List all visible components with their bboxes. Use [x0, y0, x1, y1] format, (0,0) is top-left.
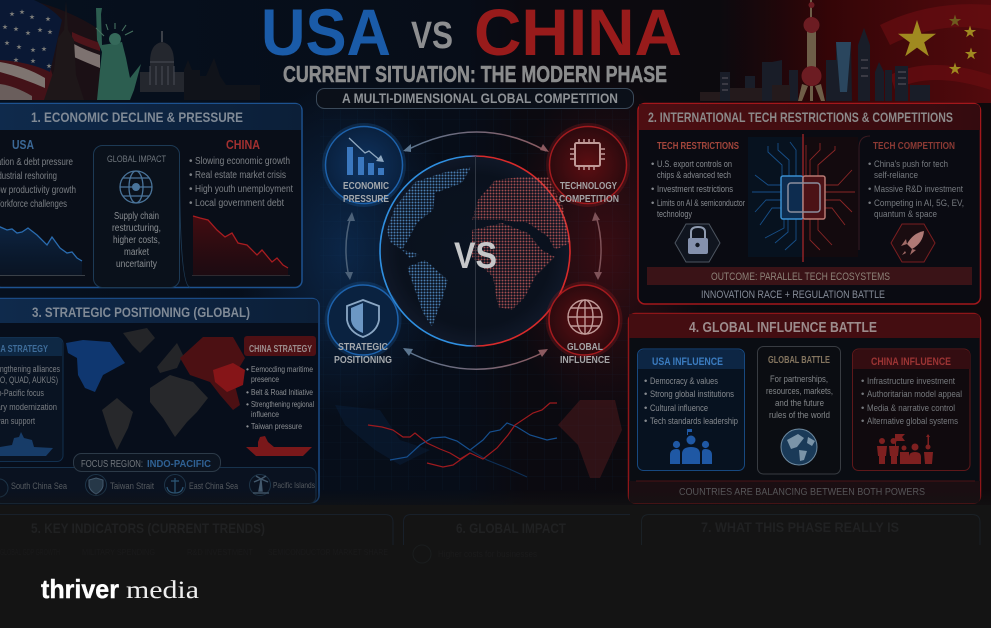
icon: shield: [347, 300, 379, 337]
subtitle: CURRENT SITUATION: THE MODERN PHASE: [283, 61, 667, 87]
node: global influence: INFLUENCE: [560, 354, 610, 366]
tech restrictions column: •: [651, 184, 654, 195]
China strategy box: presence: [251, 374, 279, 384]
USA influence card: [638, 349, 744, 470]
global impact box: GLOBAL IMPACT: [107, 154, 166, 165]
panel 1 header: [0, 104, 301, 130]
China strategy box: Eemocding maritime: [251, 364, 313, 374]
icon: globe: [120, 171, 152, 203]
global battle card: For partnerships,: [770, 374, 828, 385]
panel 5 ghost: key indicators: MILITARY SPENDING: [82, 548, 155, 557]
global battle card: rules of the world: [769, 410, 830, 421]
icon: earth: [781, 429, 817, 465]
arrow: right: [592, 212, 602, 280]
node: strategic positioning: STRATEGIC: [338, 341, 388, 353]
panel 7 ghost: what this phase really is: 7. WHAT THIS PHASE REALLY IS: [701, 519, 899, 535]
USA strategy box: [0, 338, 63, 462]
node: global influence: GLOBAL: [567, 341, 603, 353]
Taiwan Strait: [86, 474, 154, 496]
icon: padlock: [675, 224, 720, 262]
central globe: [380, 156, 570, 346]
focus region pill: INDO-PACIFIC: [147, 458, 211, 470]
China column: Slowing economic growth: [195, 156, 290, 167]
capitol building: [140, 31, 186, 92]
tech restrictions column: U.S. export controls on: [657, 159, 732, 170]
China column: CHINA: [226, 137, 260, 152]
tech restrictions column: •: [651, 198, 654, 209]
faint background continents: [335, 400, 622, 478]
China column: •: [189, 198, 193, 209]
node: technology competition: [548, 125, 628, 205]
title: [261, 0, 682, 69]
tech restrictions column: Investment restrictions: [657, 184, 733, 195]
China strategy box: CHINA STRATEGY: [249, 344, 312, 355]
bottom fade overlay: [0, 490, 991, 516]
node: economic pressure: [324, 125, 404, 205]
South China Sea: South China Sea: [11, 481, 67, 491]
flag fold highlights: [880, 4, 991, 90]
node: global influence: [548, 284, 620, 366]
arrow: top: [403, 132, 549, 152]
Pacific Islands: [250, 474, 315, 496]
USA influence card: •: [644, 403, 647, 414]
logo: thriver media: [41, 574, 199, 604]
China strategy box: Belt & Road Initiative: [251, 387, 313, 397]
China influence card: CHINA INFLUENCE: [871, 356, 951, 368]
icon: China group: [877, 434, 933, 464]
flag stars: [2, 9, 53, 68]
global impact box: [94, 146, 180, 288]
global battle card: and the future: [775, 398, 824, 409]
flag stripes: [0, 0, 100, 100]
panel 5 ghost: key indicators: R&D INVESTMENT: [187, 548, 253, 557]
world map: [66, 328, 245, 450]
red trend line: [368, 403, 557, 467]
outcome band: [647, 267, 972, 285]
global impact box: higher costs,: [113, 235, 160, 246]
icon: China warship: [246, 436, 312, 456]
USA declining line chart: [0, 226, 85, 276]
connecting arrows: [345, 132, 602, 369]
panel 3: strategic positioning: [0, 298, 319, 504]
distant skyline: [184, 58, 260, 100]
global impact box: market: [124, 247, 149, 258]
arrow: left: [345, 212, 355, 280]
Taiwan Strait: Taiwan Strait: [110, 481, 154, 491]
China influence card: •: [861, 416, 864, 427]
tech competition column: •: [868, 159, 871, 170]
tech competition column: •: [868, 198, 871, 209]
outcome band: OUTCOME: PARALLEL TECH ECOSYSTEMS: [711, 271, 890, 283]
dotted continents: Eurasia and Africa: [472, 177, 570, 310]
icon: rocket: [891, 224, 935, 262]
China column: High youth unemployment: [195, 184, 293, 195]
China influence card: Media & narrative control: [867, 403, 955, 414]
tech restrictions column: •: [651, 159, 654, 170]
USA influence card: •: [644, 389, 647, 400]
USA influence card: •: [644, 416, 647, 427]
logo: thriver media: thriver: [41, 574, 119, 604]
panel 5 ghost: key indicators: [0, 514, 393, 557]
blue trend line: [390, 423, 557, 477]
Pacific Islands: Pacific Islands: [273, 480, 315, 490]
background grid and glows: [235, 80, 705, 490]
tech competition column: Competing in AI, 5G, EV,: [874, 198, 964, 209]
skyscrapers: [720, 28, 930, 101]
China strategy box: •: [246, 421, 249, 431]
global battle card: [758, 346, 840, 474]
tech restrictions column: chips & advanced tech: [657, 170, 731, 181]
China strategy box: [244, 336, 316, 456]
tech competition column: TECH COMPETITION: [873, 140, 955, 152]
node: economic pressure: PRESSURE: [343, 193, 389, 205]
node: economic pressure: ECONOMIC: [343, 180, 389, 192]
chip illustration: [748, 134, 858, 262]
icon: microchip: [570, 139, 605, 170]
global battle card: resources, markets,: [766, 386, 833, 397]
tech competition column: [859, 136, 964, 262]
icon: falling bars: [347, 138, 384, 175]
tech competition column: Massive R&D investment: [874, 184, 963, 195]
China strategy box: Taiwan pressure: [251, 421, 302, 431]
globe VS label: VS: [454, 235, 497, 276]
China influence card: Infrastructure investment: [867, 376, 955, 387]
China influence card: •: [861, 403, 864, 414]
illustration: American flag and landmarks: [0, 0, 260, 100]
panel 4: global influence battle: [628, 314, 980, 503]
skyscraper: [44, 1, 84, 100]
dotted continents: Americas: [387, 167, 471, 327]
tech restrictions column: [651, 140, 745, 262]
China column: [180, 137, 293, 287]
China influence card: Alternative global systems: [867, 416, 958, 427]
East China Sea: East China Sea: [189, 481, 238, 491]
global impact box: restructuring,: [112, 223, 161, 234]
South China Sea: [0, 479, 67, 497]
balancing band: COUNTRIES ARE BALANCING BETWEEN BOTH POWERS: [679, 486, 925, 498]
panel 6 ghost: global impact: Higher costs for businesses: [438, 549, 537, 559]
tech restrictions column: Limits on AI & semiconductor: [657, 198, 745, 209]
panel 4 header: [629, 314, 980, 338]
central lower trend chart: [335, 400, 622, 478]
global impact box: uncertainty: [116, 259, 157, 270]
panel 7 ghost: what this phase really is: [642, 514, 980, 545]
China strategy box: •: [246, 387, 249, 397]
China influence card: •: [861, 389, 864, 400]
tagline pill: [316, 88, 634, 108]
innovation race line: INNOVATION RACE + REGULATION BATTLE: [701, 289, 885, 301]
icon: USA warship: [0, 432, 53, 456]
USA influence card: Strong global institutions: [650, 389, 734, 400]
tech competition column: •: [868, 184, 871, 195]
China column: •: [189, 156, 193, 167]
title word: VS: VS: [411, 15, 453, 57]
tech restrictions column: TECH RESTRICTIONS: [657, 140, 739, 152]
panel 5 ghost: key indicators: 5. KEY INDICATORS (CURRENT TRENDS): [31, 520, 265, 536]
USA column: [0, 137, 76, 210]
arrow: bottom: [403, 348, 548, 369]
focus regions bar: [0, 454, 316, 504]
China column: Real estate market crisis: [195, 170, 286, 181]
node: technology competition: TECHNOLOGY: [560, 180, 617, 192]
panel 4 header: 4. GLOBAL INFLUENCE BATTLE: [689, 320, 877, 336]
USA influence card: Tech standards leadership: [650, 416, 738, 427]
global battle card: GLOBAL BATTLE: [768, 354, 830, 366]
China declining line chart: [192, 216, 290, 276]
icon: USA group: [670, 429, 712, 464]
USA influence card: Democracy & values: [650, 376, 718, 387]
China strategy box: •: [246, 364, 249, 374]
panel 2: international tech restrictions: [638, 104, 980, 304]
focus region pill: FOCUS REGION:: [81, 458, 143, 470]
node: strategic positioning: [326, 284, 400, 366]
statue of liberty: [96, 8, 141, 100]
China strategy box: influence: [251, 409, 279, 419]
oriental pearl tower: [798, 0, 825, 101]
global impact box: Supply chain: [114, 211, 159, 222]
China column: Local government debt: [195, 198, 284, 209]
tech competition column: self-reliance: [874, 170, 918, 181]
East China Sea: [164, 474, 238, 496]
tagline pill: A MULTI-DIMENSIONAL GLOBAL COMPETITION: [342, 91, 618, 106]
China column: •: [189, 170, 193, 181]
node: technology competition: COMPETITION: [559, 193, 619, 205]
panel 6 ghost: global impact: [404, 514, 630, 563]
panel 1 header: 1. ECONOMIC DECLINE & PRESSURE: [31, 109, 243, 125]
node: strategic positioning: POSITIONING: [334, 354, 392, 366]
panel 5 ghost: key indicators: GLOBAL GDP GROWTH: [0, 548, 60, 557]
panel 3 header: [0, 299, 318, 323]
tech competition column: China's push for tech: [874, 159, 948, 170]
USA column: USA: [12, 137, 34, 152]
panel 5 ghost: key indicators: SEMICONDUCTOR MARKET SHARE: [268, 548, 388, 557]
China influence card: [852, 349, 970, 470]
icon: wire globe: [568, 300, 602, 334]
China influence card: •: [861, 376, 864, 387]
logo: thriver media: media: [126, 577, 199, 604]
China strategy box: •: [246, 399, 249, 409]
panel 3 header: 3. STRATEGIC POSITIONING (GLOBAL): [32, 304, 250, 320]
USA influence card: Cultural influence: [650, 403, 708, 414]
panel 6 ghost: global impact: 6. GLOBAL IMPACT: [456, 520, 566, 536]
illustration: Chinese flag and Shanghai skyline: [700, 0, 991, 103]
tech restrictions column: technology: [657, 209, 692, 220]
panel 1: economic decline and pressure: [0, 104, 302, 288]
USA influence card: USA INFLUENCE: [652, 356, 723, 368]
China strategy box: Strengthening regional: [251, 399, 314, 409]
panel 2 header: [639, 104, 980, 130]
balancing band: [629, 481, 980, 503]
USA influence card: •: [644, 376, 647, 387]
China influence card: Authoritarian model appeal: [867, 389, 962, 400]
China column: •: [189, 184, 193, 195]
focus region pill: [74, 454, 220, 472]
tech competition column: quantum & space: [874, 209, 937, 220]
flag stars: [898, 14, 977, 74]
